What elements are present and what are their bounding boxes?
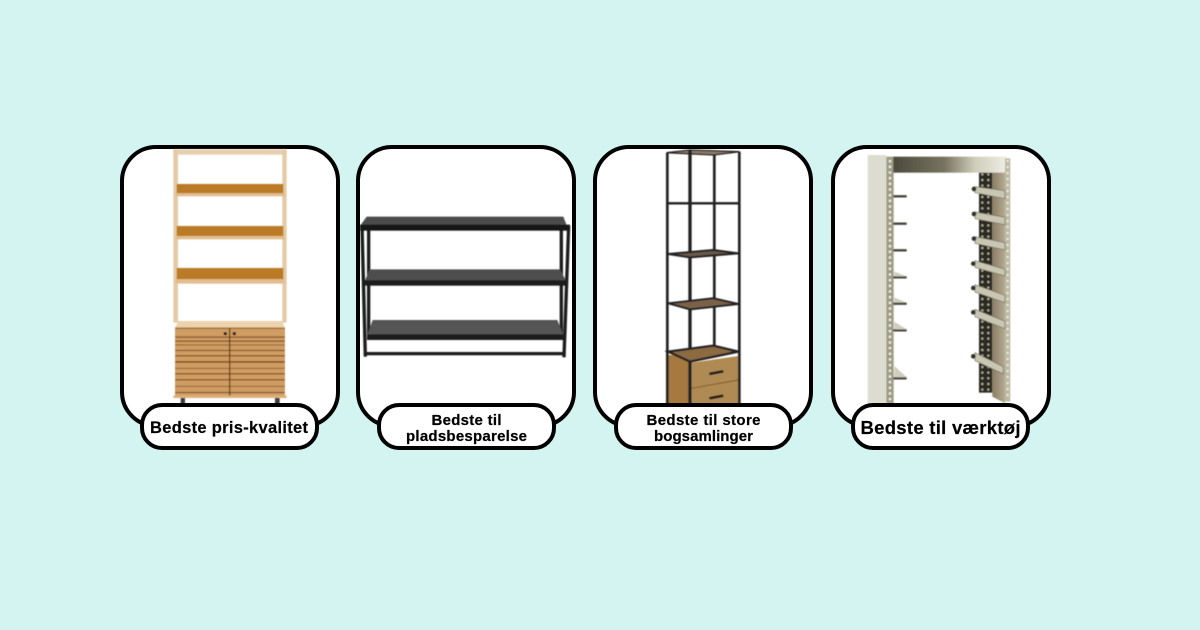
label: space saving: pladsbesparelse xyxy=(406,428,527,445)
panel: best value xyxy=(122,147,338,448)
label: tools: Bedste til værktøj xyxy=(860,417,1020,438)
label: best value xyxy=(142,405,317,448)
panel: space saving xyxy=(358,147,574,448)
panel: tools xyxy=(833,147,1049,448)
label: large book collections: Bedste til store xyxy=(646,412,760,429)
label: space saving xyxy=(379,405,554,448)
label: best value: Bedste pris-kvalitet xyxy=(150,419,308,437)
image: oak bookcase with slatted cabinet xyxy=(173,149,287,405)
image: low black metal shelf xyxy=(360,217,570,357)
label: large book collections xyxy=(616,405,791,448)
label: space saving: Bedste til xyxy=(432,412,502,429)
image: perforated steel rack xyxy=(868,155,1010,403)
panel: large book collections xyxy=(595,147,811,448)
image: tall metal tower shelf with drawers xyxy=(667,150,739,405)
label: tools xyxy=(853,405,1028,448)
label: large book collections: bogsamlinger xyxy=(654,428,753,445)
